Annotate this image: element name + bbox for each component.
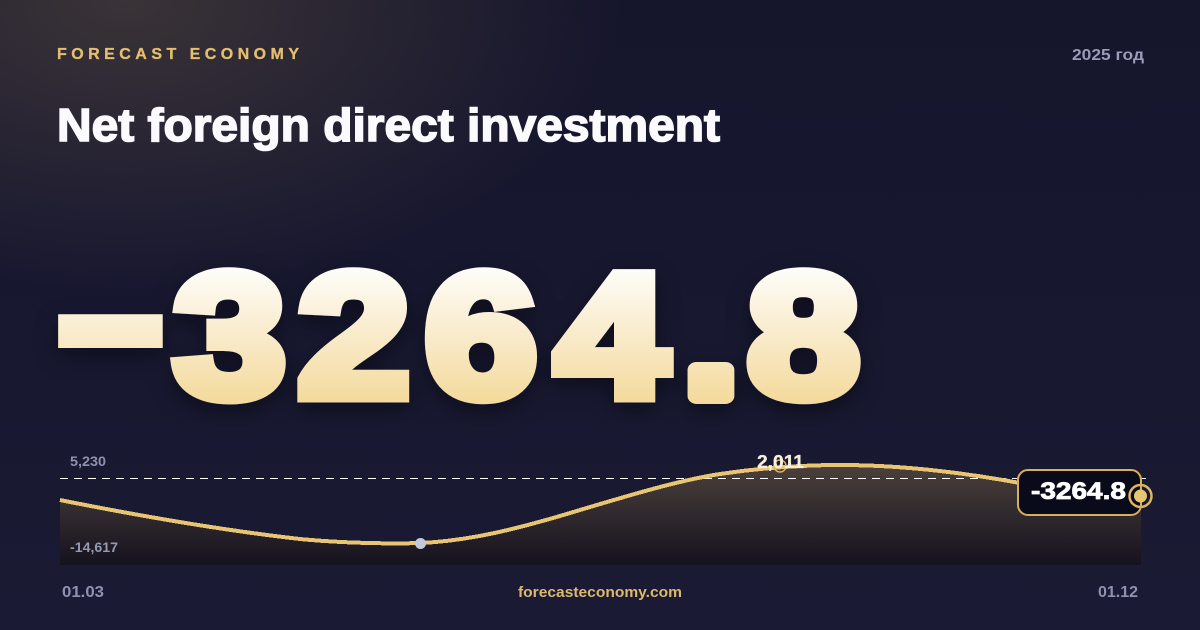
current value callout	[1018, 470, 1141, 515]
big value: 3264	[174, 237, 667, 433]
end date: 01.12	[1098, 584, 1138, 601]
big value: .	[683, 237, 739, 433]
year label: 2025 год	[1072, 47, 1144, 64]
big value: 8	[748, 237, 859, 433]
website: forecasteconomy.com	[518, 584, 682, 601]
maximum label: 2,011	[757, 452, 804, 472]
minimum point marker	[415, 538, 426, 549]
line chart	[60, 452, 1152, 565]
chart area fill	[60, 465, 1141, 565]
chart line	[60, 465, 1141, 543]
big value: -	[53, 202, 168, 426]
current value callout: -3264.8	[1031, 478, 1126, 505]
maximum point marker	[774, 460, 786, 472]
brand label: FORECAST ECONOMY	[57, 46, 299, 63]
axis low label: -14,617	[70, 539, 118, 555]
current value marker	[1130, 485, 1152, 507]
big value	[53, 202, 859, 433]
axis high label: 5,230	[70, 453, 106, 469]
start date: 01.03	[62, 584, 104, 601]
reference dashed line	[60, 478, 1146, 480]
title: Net foreign direct investment	[57, 99, 720, 151]
